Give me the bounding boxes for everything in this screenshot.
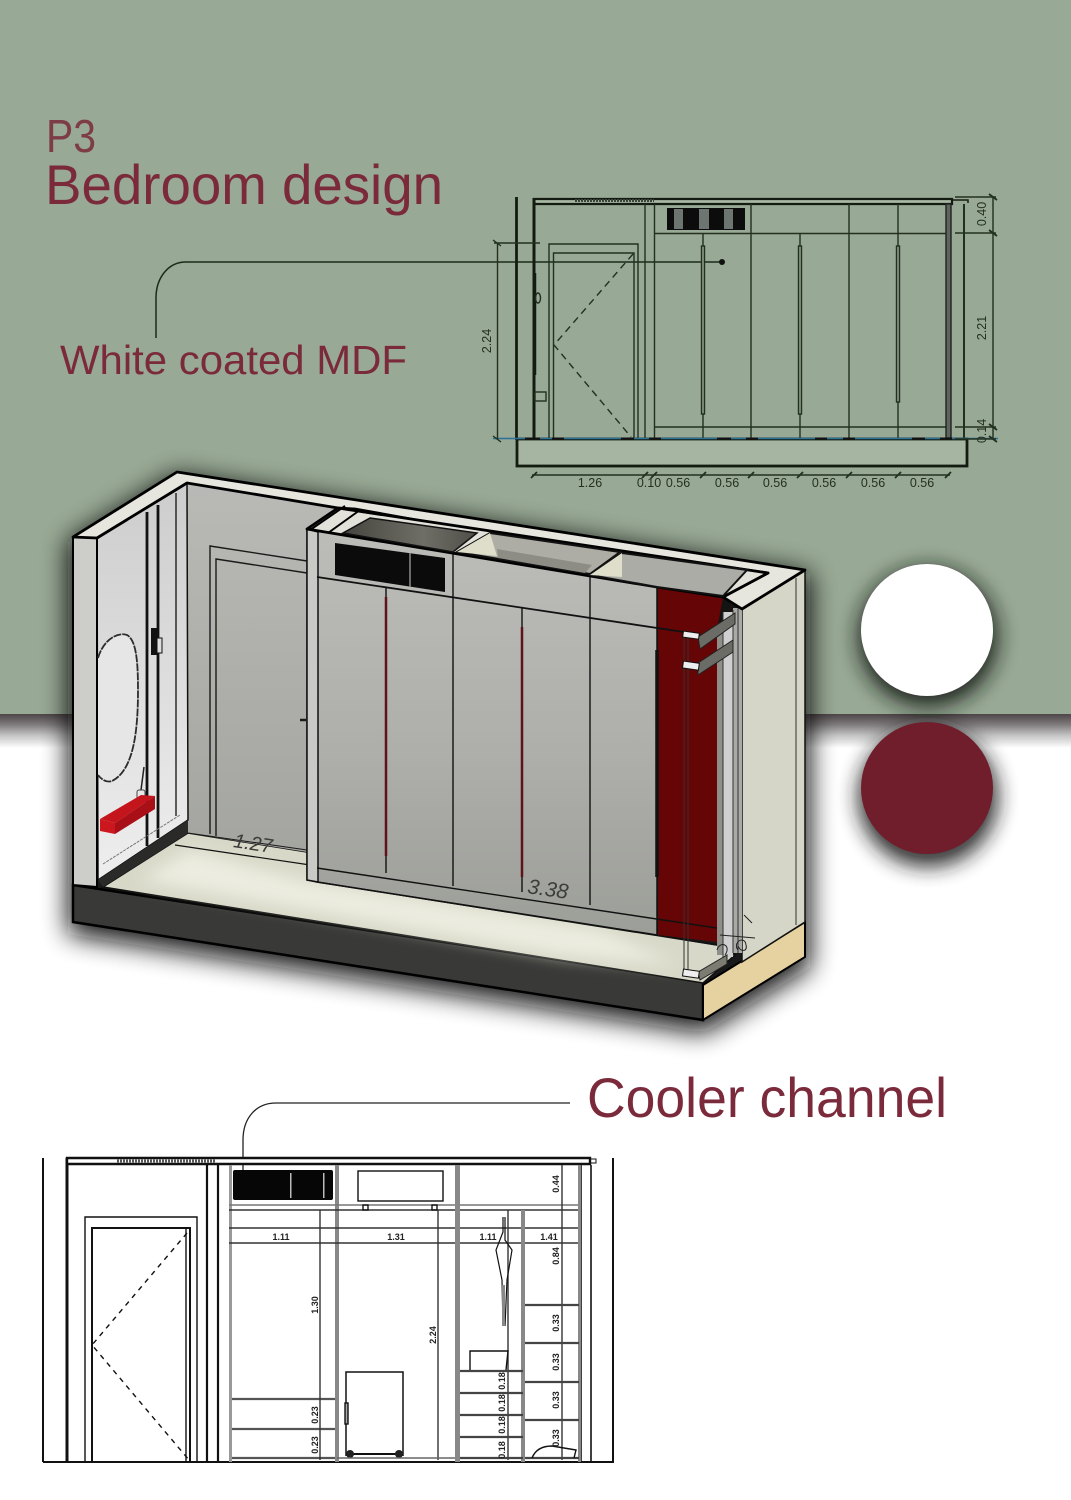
- left wall skirting: [98, 820, 188, 887]
- ground line and outer walls: [43, 1158, 614, 1462]
- label: White coated MDF: White coated MDF: [60, 337, 407, 383]
- opening 1 frame strips: [310, 506, 360, 533]
- column 4 shelves: 0.33: [551, 1391, 561, 1409]
- column 1: [229, 1165, 581, 1462]
- column 2 with upper window and box: [337, 1165, 460, 1462]
- callout arrow: White coated MDF: [156, 262, 722, 338]
- walls and ceiling: [516, 197, 968, 440]
- column 4 shelves: 0.33: [551, 1314, 561, 1332]
- wardrobe doors: [645, 204, 964, 438]
- ceiling band: [67, 1158, 596, 1164]
- door: [85, 1217, 197, 1462]
- floor highlight: [140, 850, 680, 965]
- wardrobe door lines: [317, 553, 750, 945]
- background: floor shadow band: [0, 714, 1071, 748]
- column 4 shelves: 1.41: [540, 1232, 558, 1242]
- column 3 with hanger and drawers: 0.18: [497, 1372, 507, 1390]
- title: Bedroom design: [45, 153, 443, 216]
- base: dark plinth: [73, 885, 703, 1020]
- base: timber end: [703, 922, 805, 1020]
- wall switch: [151, 628, 162, 655]
- wardrobe dimension: 3.38: 3.38: [526, 875, 570, 904]
- dimension lines: right side: 0.40: [975, 202, 989, 226]
- callout arrow: Cooler channel: [243, 1103, 570, 1172]
- column 1: 1.11: [272, 1232, 290, 1242]
- dimension lines: right side: [955, 194, 997, 443]
- opening 1: [343, 518, 477, 552]
- dimension scribble at wardrobe corner: [717, 915, 755, 955]
- column 4 shelves: [525, 1165, 581, 1462]
- dimension lines: bottom: 1.26: [578, 476, 602, 490]
- floor dimension: 1.27: 1.27: [232, 830, 275, 858]
- colour swatch: burgundy: [858, 722, 998, 867]
- wardrobe side strip: [307, 529, 318, 882]
- column 2 with upper window and box: 2.24: [428, 1326, 438, 1344]
- right wall face: [742, 570, 805, 962]
- door: [549, 244, 638, 438]
- colour swatch: white: [858, 564, 998, 707]
- wall fittings: [535, 293, 546, 401]
- shelf bracket lower: [683, 640, 733, 675]
- cooler channel grille: [233, 1170, 333, 1200]
- opening 3: [590, 553, 747, 596]
- shelf bracket upper: [683, 613, 735, 649]
- title: [45, 110, 443, 216]
- ceiling band above wardrobe: [307, 508, 768, 597]
- floor dimension: 1.27: [175, 830, 317, 866]
- wall top and ceiling frame: [73, 472, 805, 609]
- column 2 with upper window and box: 1.31: [387, 1232, 405, 1242]
- column 1: 1.30: [310, 1296, 320, 1314]
- dimension lines: bottom: [531, 472, 951, 490]
- red side panel: [658, 587, 723, 942]
- column 4 shelves: 0.84: [551, 1247, 561, 1265]
- left wall: [97, 483, 188, 880]
- left wall front edge: [73, 537, 97, 887]
- model shadow: [73, 480, 805, 1028]
- red door handles: [386, 597, 522, 877]
- right column strips: [684, 578, 796, 975]
- title: P3: [46, 110, 96, 162]
- dimension lines: bottom: 0.56: [812, 476, 836, 490]
- floor: [103, 833, 735, 983]
- column 3 with hanger and drawers: 0.18: [497, 1394, 507, 1412]
- background: sage wall: [0, 0, 1071, 714]
- back wall: [187, 483, 338, 852]
- cooler grille: [667, 208, 745, 230]
- callout dot: [719, 259, 725, 265]
- column 4 shelves: 0.33: [551, 1353, 561, 1371]
- red wall shelf: [100, 795, 155, 834]
- column 1: 0.23: [310, 1406, 320, 1424]
- dimension line: 2.24: [480, 240, 540, 442]
- column 3 with hanger and drawers: 1.11: [479, 1232, 497, 1242]
- dimension lines: bottom: 0.56: [666, 476, 690, 490]
- vase on red shelf: [137, 767, 145, 802]
- dimension lines: bottom: 0.56: [763, 476, 787, 490]
- floor level line: [493, 438, 998, 440]
- room door: [188, 546, 307, 850]
- 3D bedroom model: [73, 472, 805, 1028]
- floor slab: [517, 439, 967, 466]
- dimension line: 2.24: 2.24: [480, 329, 494, 353]
- dimension lines: right side: 2.21: [975, 316, 989, 340]
- top elevation drawing: [480, 194, 998, 490]
- dimension lines: bottom: 0.10: [637, 476, 661, 490]
- column 4 shelves: 0.33: [551, 1429, 561, 1447]
- dimension lines: bottom: 0.56: [910, 476, 934, 490]
- column 1: 0.23: [310, 1436, 320, 1454]
- shelf bracket floor: [683, 955, 727, 980]
- column 4 shelves: 0.44: [551, 1175, 561, 1193]
- column 3 with hanger and drawers: 0.18: [497, 1416, 507, 1434]
- mirror: [98, 634, 138, 782]
- dimension lines: bottom: 0.56: [861, 476, 885, 490]
- wardrobe body: [307, 529, 657, 935]
- dimension lines: right side: 0.14: [975, 419, 989, 443]
- label: Cooler channel: Cooler channel: [587, 1066, 947, 1129]
- column 3 with hanger and drawers: [460, 1210, 525, 1462]
- cooler channel grille: [335, 543, 445, 592]
- left wall lines: [103, 493, 180, 864]
- column 3 with hanger and drawers: 0.18: [497, 1441, 507, 1459]
- dimension lines: bottom: 0.56: [715, 476, 739, 490]
- bottom elevation drawing: [43, 1158, 614, 1462]
- opening 2: [457, 533, 620, 574]
